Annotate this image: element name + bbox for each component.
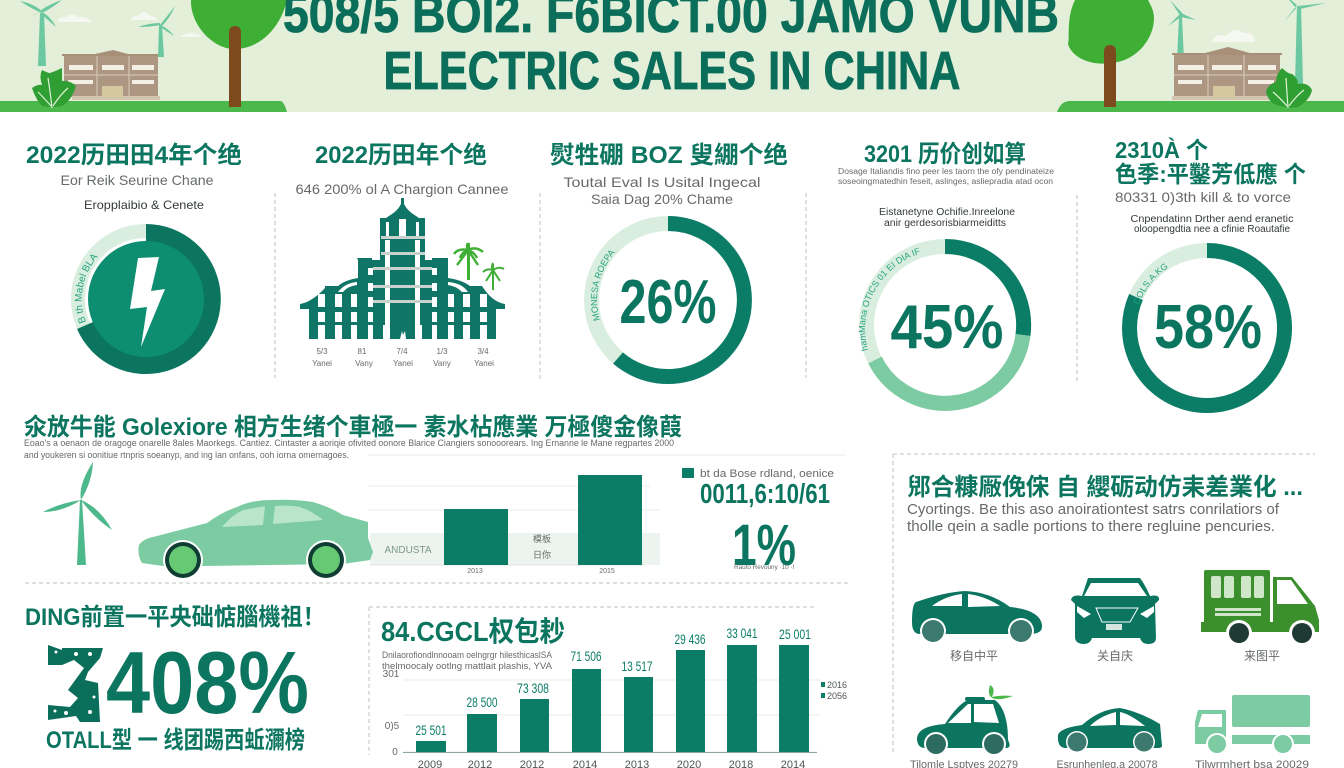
donut (71, 224, 221, 374)
left ground (0, 101, 287, 112)
icon: electric car (138, 500, 373, 580)
axis labels: Yanei (474, 359, 494, 368)
axis line (403, 752, 817, 754)
caption (1130, 214, 1294, 235)
icon: left clouds (57, 12, 202, 37)
icon: hatchback with leaf (917, 685, 1013, 756)
legend: 2056 (827, 691, 847, 701)
axis labels: 81 (358, 347, 367, 356)
panel: stat 1 lightning donut (26, 142, 242, 374)
panel: stat 5 donut 58% (1115, 136, 1306, 413)
icon: left bush (32, 68, 76, 108)
bars (444, 475, 642, 565)
ring label: COLS.A.KG (1134, 264, 1168, 304)
icon: left tree (191, 0, 287, 107)
subheading: Toutal Eval Is Usital Ingecal (564, 174, 760, 190)
heading (1115, 136, 1306, 187)
panel: yearly bar chart (381, 616, 847, 768)
caption: anir gerdesorisbiarmeiditts (884, 218, 1006, 229)
body text: Cyortings. Be this aso anoirationtest satrs conrilatiors of (907, 501, 1280, 518)
y axis labels: 0)5 (385, 721, 400, 732)
heading: 3201 历价创如算 (864, 141, 1026, 168)
stat percent: 1% (732, 513, 796, 578)
axis labels: 1/3 (436, 347, 448, 356)
legend (821, 680, 847, 701)
icon: lightning bolt (130, 257, 165, 347)
ring label: MONESA ROEPA (590, 250, 615, 321)
value labels: 28 500 (466, 694, 498, 710)
axis labels: 3/4 (477, 347, 489, 356)
title (283, 0, 1059, 101)
icon: left wind turbine 2 (138, 6, 175, 57)
heading: DING前置一平央础惦腦機祖！ (25, 604, 325, 631)
fine print (838, 167, 1055, 186)
grid (403, 680, 820, 752)
fine print: soseoingmatedhin feseit, aslinges, asliepradia atad ocon (838, 177, 1053, 186)
icon: car front (1071, 578, 1159, 644)
heading: 2022历田田4年个绝 (26, 142, 242, 169)
bar labels: 日你 (533, 549, 551, 560)
y axis labels (383, 669, 400, 758)
heading: 2310À 个 (1115, 136, 1208, 163)
icon: right building (1172, 47, 1282, 100)
icon: sedan 2 (1058, 708, 1162, 753)
bar labels: ANDUSTA (384, 545, 432, 556)
axis labels: 5/3 (316, 347, 328, 356)
panel: stat 3 donut 26% (550, 142, 788, 384)
fine print: Dosage Italiandis fino peer les taorn the ofy pendinateize (838, 167, 1055, 176)
value: 26% (620, 268, 716, 337)
icon: palm trees (454, 243, 504, 290)
icon: right bush (1266, 68, 1312, 108)
subheading: Eor Reik Seurine Chane (60, 172, 214, 188)
dividers (25, 193, 1315, 755)
icon: sedan (912, 591, 1042, 644)
y axis labels: 0 (392, 747, 398, 758)
bar labels: 模板 (533, 533, 551, 544)
caption: Eropplaibio & Cenete (84, 198, 204, 212)
ring label: B th Mabel BLA (74, 254, 98, 324)
legend: bt da Bose rdland, oenice (700, 468, 834, 480)
axis labels (312, 347, 494, 368)
value labels: 29 436 (674, 631, 706, 647)
stat caption: Rauto Revouny ·10 ·l (734, 565, 794, 571)
value: 45% (890, 293, 1004, 362)
icon: jagged bolt digit (48, 645, 103, 722)
panel: stat 2 landmark (296, 142, 509, 368)
body text (382, 650, 552, 671)
body text: Eoao's a oenaon de oragoge onarelle 8ales Maorkegs. Cantiez. Cintaster a aoriqie ofivited oonore Blarice Ciangiers sonooorears. Ing Ernanne le Mane regpartes 2000 (24, 438, 674, 448)
bars (416, 645, 809, 752)
body text: thelmoocaly ootlng mattlait plashis, YVA (382, 661, 552, 671)
icon: right tree (1068, 0, 1154, 107)
body text: tholle qein a sadle portions to there regluine pencuries. (907, 518, 1275, 535)
axis labels: Yanei (393, 359, 413, 368)
title: ELECTRIC SALES IN CHINA (384, 41, 960, 101)
subheading: 80331 0)3th kill & to vorce (1115, 189, 1291, 205)
right ground (1057, 101, 1344, 112)
panel: vehicle types (907, 473, 1319, 768)
icon: right clouds (1212, 30, 1255, 42)
bar chart background (368, 486, 660, 565)
body text (907, 501, 1280, 535)
caption: Eistanetyne Ochifie.Inreelone (879, 207, 1015, 218)
icon: left wind turbine 1 (20, 0, 62, 66)
heading: 2022历田年个绝 (315, 142, 487, 169)
label: 移自中平 (950, 648, 998, 663)
caption: OTALL型 一 线团踢西蚯瀰榜 (46, 727, 305, 754)
caption: oloopengdtia nee a cfinie Roautafie (1134, 224, 1290, 235)
heading: 熨牲硼 BOZ 叟綳个绝 (550, 142, 788, 169)
value: 58% (1154, 293, 1262, 362)
panel: sales section (24, 413, 834, 580)
value labels: 33 041 (726, 625, 758, 641)
body text: and youkeren si oonitiue rtnpris soeanyp, and ing lan onfans, ooh iorna omernagoes. (24, 450, 349, 460)
year labels (418, 759, 805, 768)
caption (879, 207, 1015, 229)
body text: Dnilaorofiondlnnooam oelngrgr hilesthicaslSA (382, 650, 552, 660)
axis labels: 7/4 (396, 347, 408, 356)
header banner (0, 0, 1344, 112)
heading: 色季:平鑿芳低應 个 (1115, 161, 1306, 187)
legend: 2016 (827, 680, 847, 690)
axis labels: Vany (355, 359, 373, 368)
caption: Cnpendatinn Drther aend eranetic (1130, 214, 1294, 225)
value labels: 25 001 (779, 626, 811, 642)
heading: 84.CGCL权包耖 (381, 616, 565, 647)
icon: landmark building (300, 198, 505, 339)
bar labels (384, 533, 615, 575)
axis labels: Yanei (312, 359, 332, 368)
donut (1122, 243, 1292, 413)
panel: stat 4 donut 45% (838, 141, 1055, 411)
ring label: hamMana OTICS 01 EI DIA IF (858, 248, 920, 352)
value labels (416, 625, 811, 738)
bar labels: 2015 (599, 568, 615, 575)
heading: 郳合糠厰俛俕 自 纓砺动仿耒差業化 ... (907, 473, 1303, 501)
subheading: 646 200% ol A Chargion Cannee (296, 181, 509, 197)
value labels: 25 501 (416, 722, 447, 738)
donut (858, 239, 1032, 411)
value labels: 71 506 (570, 648, 602, 664)
big value: 408% (106, 633, 309, 732)
label: 关自庆 (1097, 649, 1133, 663)
icon: right wind turbine 1 (1168, 0, 1196, 60)
donut (584, 216, 752, 384)
icon: green truck (1201, 570, 1319, 646)
value labels: 13 517 (622, 658, 653, 674)
y axis labels: 301 (383, 669, 400, 680)
heading: 氽放牛能 Golexiore 相方生绪个車極一 素水枮應業 万極傻金像葭 (24, 413, 682, 441)
panel: stat 3 donut 26%: Saia Dag 20% Chame (591, 191, 733, 207)
label: 来图平 (1244, 649, 1280, 663)
icon: light truck (1195, 695, 1310, 754)
stat value: 0011,6:10/61 (700, 478, 830, 509)
bar labels: 2013 (467, 568, 483, 575)
body text (24, 438, 674, 460)
panel: total share (25, 604, 325, 754)
value labels: 73 308 (517, 680, 549, 696)
icon: right wind turbine 2 (1284, 0, 1326, 84)
axis labels: Vany (433, 359, 451, 368)
icon: wind turbine (43, 462, 112, 565)
icon: left building (62, 50, 160, 100)
